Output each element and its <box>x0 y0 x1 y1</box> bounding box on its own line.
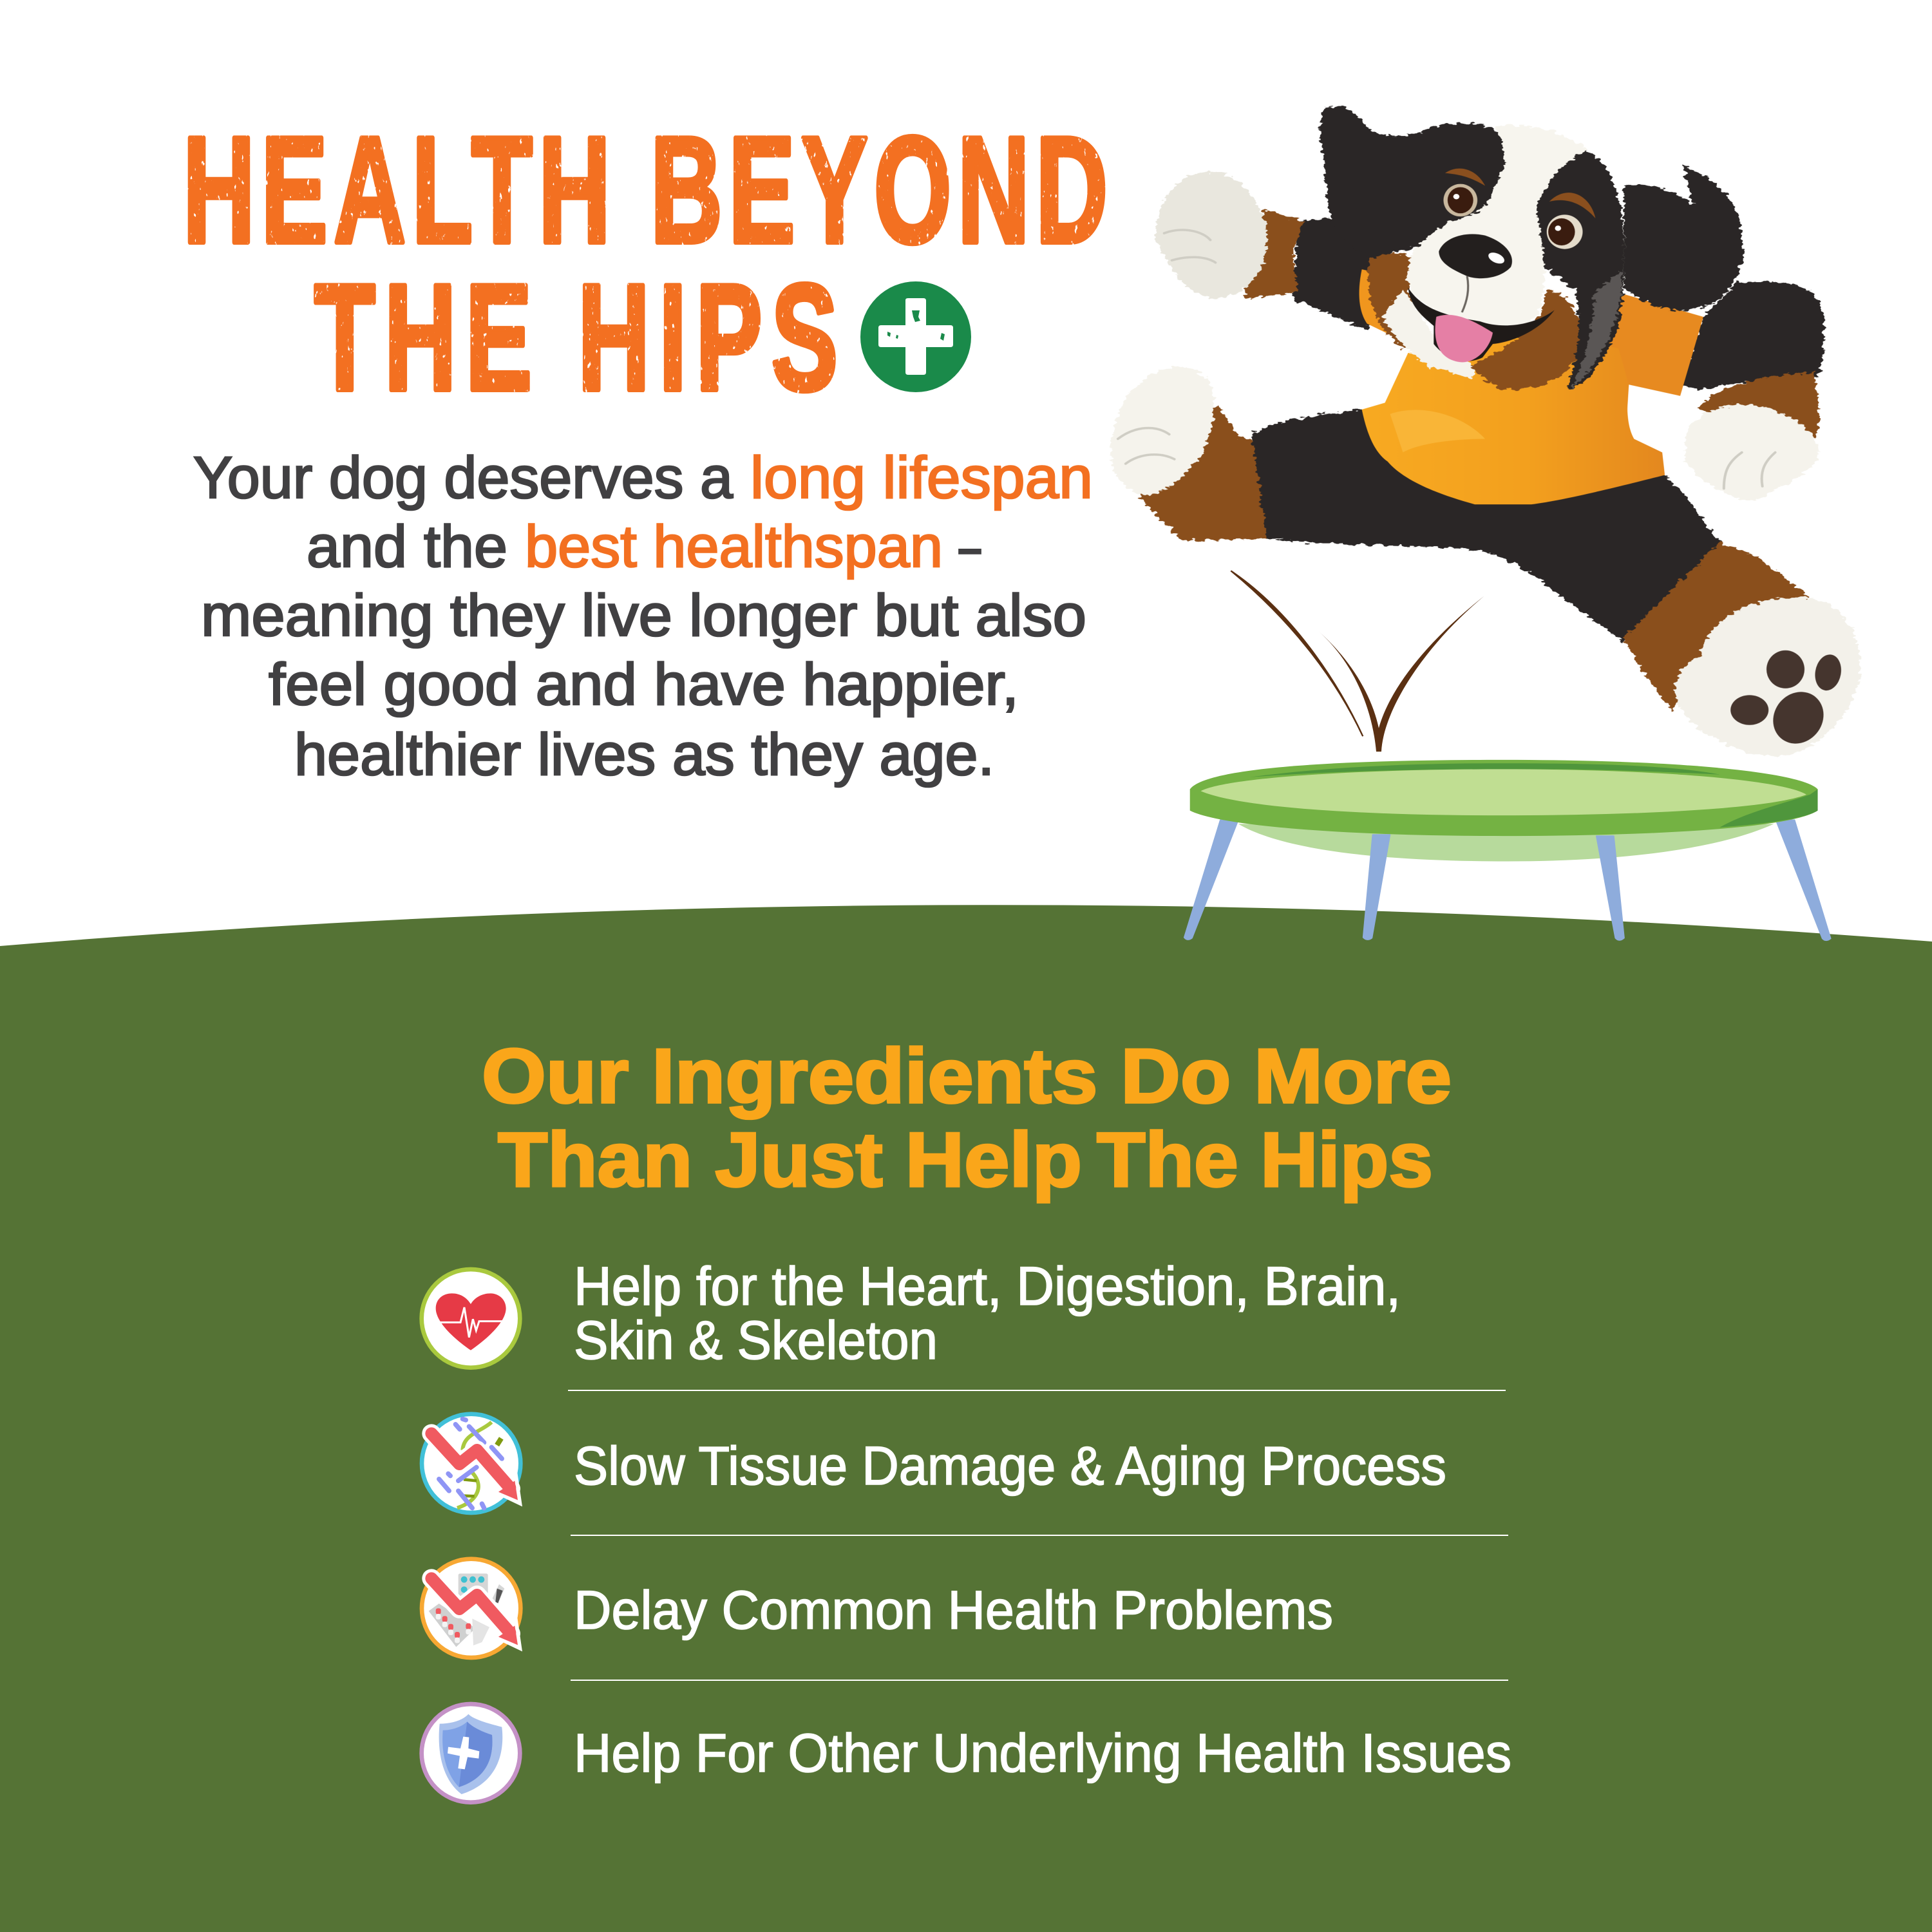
icon: green plus badge <box>860 281 971 392</box>
icon: heart <box>422 1269 520 1368</box>
section heading: Than Just Help <box>498 1117 1082 1203</box>
section heading: The Hips <box>1097 1117 1433 1203</box>
intro paragraph: Your dog deserves a <box>193 445 734 511</box>
list item 3: Delay Common Health Problems <box>574 1580 1333 1640</box>
title: HEALTH BEYOND <box>183 106 1108 275</box>
trampoline bowl <box>1238 824 1774 862</box>
title <box>183 106 1108 422</box>
green ground panel <box>0 905 1932 1932</box>
dog mouth and tongue <box>1408 287 1555 361</box>
list item 2: Slow Tissue Damage & Aging Process <box>574 1435 1446 1496</box>
intro paragraph: healthier lives as they age. <box>294 722 994 788</box>
intro paragraph: and the <box>307 514 507 580</box>
icon: shield <box>422 1704 520 1803</box>
trampoline mat <box>1201 769 1806 815</box>
dog left arm <box>1156 172 1383 330</box>
intro paragraph: – <box>959 514 981 580</box>
dog nose <box>1439 234 1512 278</box>
list item 4: Help For Other Underlying Health Issues <box>574 1723 1511 1783</box>
trampoline rim <box>1190 760 1818 836</box>
dog paw details <box>1118 230 1844 750</box>
icon: DNA with falling arrow <box>422 1414 522 1513</box>
illustration: jumping dog <box>1110 106 1861 756</box>
list item 1: Skin & Skeleton <box>574 1310 938 1370</box>
intro paragraph: feel good and have happier, <box>269 652 1019 717</box>
section heading <box>482 1033 1452 1203</box>
dog body and rear leg <box>1251 410 1861 756</box>
section heading: Our Ingredients Do More <box>482 1033 1452 1119</box>
list item 1: Help for the Heart, Digestion, Brain, <box>574 1256 1401 1316</box>
dog eyes <box>1443 184 1583 249</box>
dog brows <box>1445 169 1595 218</box>
title: THE HIPS <box>314 254 838 422</box>
trampoline legs <box>1184 820 1830 940</box>
dog head fur <box>1320 106 1743 390</box>
dog right arm <box>1680 282 1824 500</box>
icon: medicine with falling arrow <box>422 1559 522 1658</box>
intro paragraph: long lifespan <box>750 445 1093 511</box>
intro paragraph: best healthspan <box>525 514 943 580</box>
list item 1 <box>574 1256 1401 1370</box>
motion lines <box>1231 571 1484 752</box>
dog furry limbs and body <box>1110 172 1861 756</box>
illustration: trampoline <box>1184 760 1830 940</box>
intro paragraph <box>193 445 1093 788</box>
dog lower front leg <box>1110 366 1269 540</box>
dog orange shirt <box>1359 269 1703 504</box>
intro paragraph: meaning they live longer but also <box>201 583 1086 649</box>
